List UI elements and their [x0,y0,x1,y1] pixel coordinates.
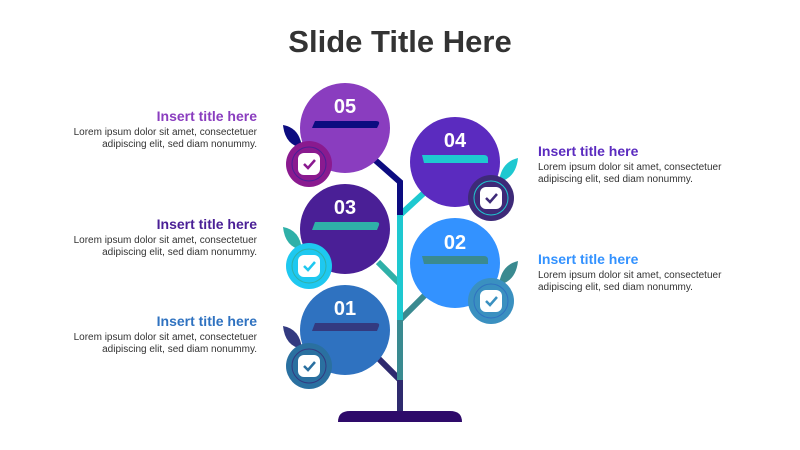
badge 01 [283,326,332,389]
text: 01 [74,313,257,355]
badge 03 [283,227,332,289]
circle 04: 04 [444,130,467,152]
badge 05 [283,125,332,187]
pot base [338,411,462,422]
circle 05: 05 [334,96,356,118]
circle 03 [300,184,390,274]
text: 05: Lorem ipsum dolor sit amet, consectetuer [74,127,257,138]
badge 02 [468,261,518,324]
circle 02: 02 [444,232,466,254]
text: 05 [74,108,257,150]
text: 03: Lorem ipsum dolor sit amet, consectetuer [74,235,257,246]
text: 04: adipiscing elit, sed diam nonummy. [538,174,693,185]
text: 04: Insert title here [538,143,638,159]
text: 01: Insert title here [157,313,257,329]
text: 02 [538,251,722,293]
circle 01 [300,285,390,375]
text: 03: Insert title here [157,216,257,232]
circle 03: 03 [334,197,356,219]
badge 04 [468,158,518,221]
circle 05 [300,83,390,173]
text: 02: Lorem ipsum dolor sit amet, consectetuer [538,270,721,281]
title: Slide Title Here [288,24,512,59]
text: 03: adipiscing elit, sed diam nonummy. [102,247,257,258]
circle 02 [410,218,500,308]
text: 01: adipiscing elit, sed diam nonummy. [102,344,257,355]
circle 01: 01 [334,298,356,320]
circle 04 [410,117,500,207]
text: 02: Insert title here [538,251,638,267]
text: 04: Lorem ipsum dolor sit amet, consectetuer [538,162,721,173]
text: 01: Lorem ipsum dolor sit amet, consectetuer [74,332,257,343]
text: 05: adipiscing elit, sed diam nonummy. [102,139,257,150]
text: 05: Insert title here [157,108,257,124]
trunk and branches [375,160,425,420]
text: 04 [538,143,722,185]
text: 02: adipiscing elit, sed diam nonummy. [538,282,693,293]
text: 03 [74,216,257,258]
